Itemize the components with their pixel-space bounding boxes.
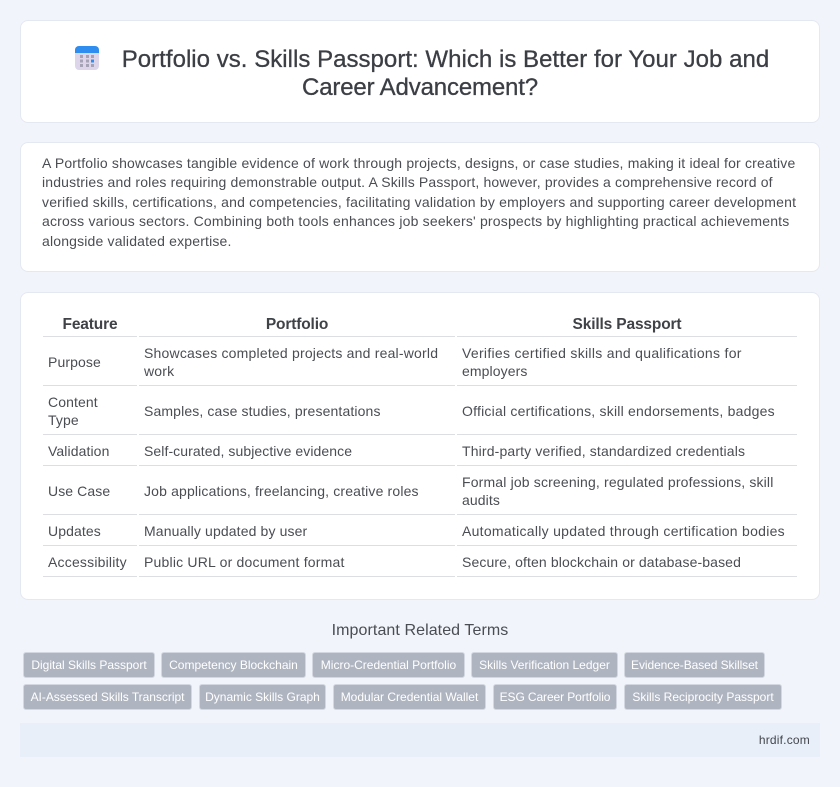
row: use case (48, 474, 773, 508)
tag: Digital Skills Passport (31, 658, 147, 672)
tag: Skills Verification Ledger (479, 658, 610, 672)
related terms tags (23, 652, 782, 710)
row: updates: Manually updated by user (144, 523, 307, 539)
footer (20, 723, 820, 757)
tag (471, 652, 618, 678)
summary text: across various sectors. Combining both tools enhances job seekers' prospects by highlighting practical achievements (42, 213, 789, 229)
tag (624, 684, 782, 710)
row: updates: Automatically updated through certification bodies (462, 523, 785, 539)
row: validation: Validation (48, 443, 109, 459)
footer source: hrdif.com (759, 733, 810, 747)
row: use case: audits (462, 492, 500, 508)
tag: Competency Blockchain (169, 658, 298, 672)
row: accessibility: Secure, often blockchain or database-based (462, 554, 741, 570)
row: purpose: Purpose (48, 354, 101, 370)
comparison table card (20, 292, 820, 600)
row: accessibility (48, 554, 741, 570)
summary text: A Portfolio showcases tangible evidence of work through projects, designs, or case studies, making it ideal for creative (42, 154, 795, 170)
title card (20, 20, 820, 123)
row: purpose (48, 345, 742, 379)
tag: Evidence-Based Skillset (631, 658, 758, 672)
tag: AI-Assessed Skills Transcript (31, 690, 184, 704)
title: Portfolio vs. Skills Passport: Which is Better for Your Job and (122, 46, 769, 73)
row: validation (48, 443, 745, 459)
row: use case: Formal job screening, regulated professions, skill (462, 474, 773, 490)
row: use case: Use Case (48, 483, 110, 499)
tag (199, 684, 326, 710)
row: content type: Content (48, 394, 98, 410)
row: content type: Type (48, 412, 79, 428)
row: purpose: work (144, 363, 174, 379)
tag: Micro-Credential Portfolio (321, 658, 456, 672)
tag: Modular Credential Wallet (341, 690, 478, 704)
row: use case: Job applications, freelancing, creative roles (144, 483, 419, 499)
column headers: Feature (63, 316, 117, 333)
tag (312, 652, 465, 678)
summary text: alongside validated expertise. (42, 233, 232, 249)
column headers (63, 316, 682, 333)
column headers: Skills Passport (573, 316, 681, 333)
tag (23, 652, 155, 678)
tag (624, 652, 765, 678)
tag: Skills Reciprocity Passport (632, 690, 774, 704)
row: purpose: Showcases completed projects and real-world (144, 345, 438, 361)
row: validation: Self-curated, subjective evidence (144, 443, 352, 459)
row: updates (48, 523, 785, 539)
tag: Dynamic Skills Graph (205, 690, 320, 704)
summary text (42, 154, 796, 249)
summary text: industries and roles requiring demonstrable output. A Skills Passport, however, provides a comprehensive record of (42, 174, 773, 190)
row: purpose: employers (462, 363, 527, 379)
row: content type: Samples, case studies, presentations (144, 403, 381, 419)
tag (23, 684, 192, 710)
tag (493, 684, 617, 710)
row: content type: Official certifications, skill endorsements, badges (462, 403, 775, 419)
icon: calendar (75, 46, 99, 70)
summary text: verified skills, certifications, and competencies, facilitating validation by employers and supporting career development (42, 194, 796, 210)
row: accessibility: Public URL or document format (144, 554, 345, 570)
row: accessibility: Accessibility (48, 554, 127, 570)
row: updates: Updates (48, 523, 101, 539)
row: purpose: Verifies certified skills and qualifications for (462, 345, 742, 361)
title (122, 46, 769, 101)
summary card (20, 142, 820, 272)
related terms heading: Important Related Terms (332, 622, 508, 639)
tag (333, 684, 486, 710)
row: content type (48, 394, 775, 428)
row: validation: Third-party verified, standardized credentials (462, 443, 745, 459)
column headers: Portfolio (266, 316, 328, 333)
title: Career Advancement? (302, 74, 538, 101)
tag: ESG Career Portfolio (500, 690, 610, 704)
tag (161, 652, 306, 678)
